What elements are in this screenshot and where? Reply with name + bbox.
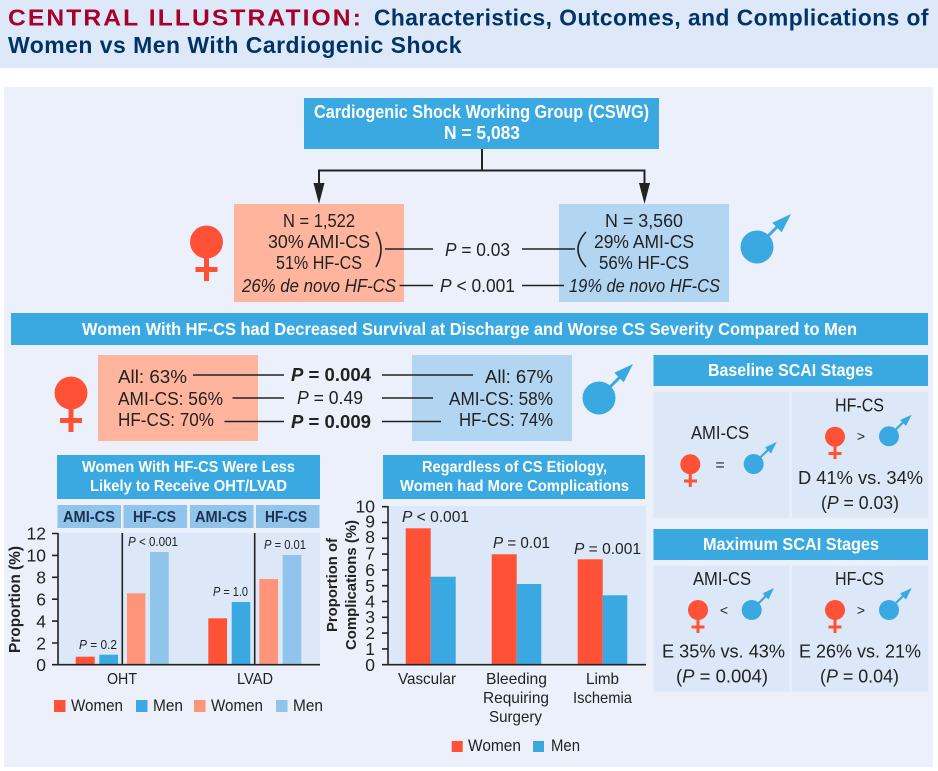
cohort box: [304, 98, 659, 149]
legend: complications chart: Women: [468, 737, 521, 755]
heading: OHT/LVAD chart: Likely to Receive OHT/LVAD: [90, 478, 287, 495]
cohort box: N = 5,083: [444, 123, 520, 143]
title: [8, 4, 929, 58]
panel: maximum AMI-CS: [654, 566, 790, 692]
bar chart: OHT and LVAD: 8: [36, 568, 46, 588]
bar chart: complications: 6: [365, 560, 375, 580]
panel: maximum AMI-CS: AMI-CS: [693, 569, 751, 589]
heading: baseline SCAI stages: [654, 355, 928, 386]
legend: OHT and LVAD chart: Men: [153, 697, 183, 715]
icon: female symbol: [190, 226, 223, 281]
bar chart: OHT and LVAD: P = 1.0: [213, 585, 248, 599]
panel: maximum AMI-CS: E 35% vs. 43%: [662, 642, 785, 662]
panel: women survival: AMI-CS: 56%: [118, 388, 223, 409]
panel: maximum AMI-CS: (P = 0.004): [676, 667, 768, 687]
heading: OHT/LVAD chart: Women With HF-CS Were Less: [82, 459, 295, 476]
cohort box: Cardiogenic Shock Working Group (CSWG): [314, 102, 649, 122]
legend: OHT and LVAD chart: Women: [71, 697, 123, 715]
bar chart: complications: 8: [365, 527, 375, 547]
bar chart: OHT and LVAD: LVAD: [237, 671, 273, 688]
title: CENTRAL ILLUSTRATION:: [8, 4, 363, 30]
bar chart: OHT and LVAD: P = 0.01: [264, 538, 306, 552]
bar chart: OHT and LVAD: 12: [27, 524, 46, 544]
panel: women cohort: 51% HF-CS: [276, 252, 362, 273]
bar chart: complications: Bleeding: [486, 671, 547, 688]
panel: baseline HF-CS: [792, 392, 928, 518]
legend: OHT and LVAD chart: Men: [293, 697, 323, 715]
panel: men cohort: [559, 204, 729, 302]
panel: women cohort: 26% de novo HF-CS: [241, 275, 397, 296]
heading: complications chart: Women had More Complications: [400, 478, 629, 495]
panel: men cohort: 56% HF-CS: [599, 252, 689, 273]
bar chart: complications: Complications (%): [343, 520, 360, 650]
panel: men survival: HF-CS: 74%: [459, 409, 553, 430]
panel: baseline HF-CS: D 41% vs. 34%: [798, 468, 923, 488]
bar chart: OHT and LVAD: P < 0.001: [128, 535, 178, 549]
bar chart: OHT and LVAD: 6: [36, 590, 46, 610]
survival comparison P values: P = 0.49: [297, 388, 363, 408]
panel: maximum HF-CS: [792, 566, 928, 692]
survival comparison P values: P = 0.004: [291, 365, 371, 385]
bar chart: complications: P = 0.01: [493, 535, 550, 552]
bar chart: complications: 10: [356, 496, 375, 516]
bar chart: complications: P = 0.001: [574, 541, 641, 558]
bar chart: complications: 9: [365, 512, 375, 532]
panel: maximum HF-CS: E 26% vs. 21%: [799, 642, 921, 662]
panel: women cohort: 30% AMI-CS: [268, 231, 370, 252]
bar chart: complications: Ischemia: [573, 690, 632, 707]
survival comparison P values: [193, 365, 473, 432]
column headers: HF-CS: [133, 509, 176, 526]
bar chart: OHT and LVAD: [7, 524, 320, 688]
column headers: [58, 505, 320, 528]
title: Characteristics, Outcomes, and Complications of: [374, 4, 929, 30]
heading: complications chart: Regardless of CS Etiology,: [422, 459, 607, 476]
panel: women survival: HF-CS: 70%: [118, 409, 214, 430]
heading: survival band: Women With HF-CS had Decreased Survival at Discharge and Worse CS Severity Compared to Men: [82, 319, 857, 339]
bar chart: complications: Vascular: [398, 671, 457, 688]
bar chart: OHT and LVAD: 0: [36, 655, 46, 675]
bar chart: complications: 3: [365, 607, 375, 627]
panel: maximum HF-CS: >: [857, 602, 865, 618]
bar chart: complications: P < 0.001: [402, 509, 469, 526]
title: Women vs Men With Cardiogenic Shock: [8, 32, 462, 58]
bar chart: OHT and LVAD: OHT: [107, 671, 137, 688]
panel: women cohort: N = 1,522: [283, 210, 355, 231]
header band: [0, 0, 938, 68]
bar chart: complications: 1: [365, 639, 375, 659]
panel: baseline AMI-CS: AMI-CS: [691, 423, 749, 443]
bar chart: complications: Surgery: [489, 709, 542, 726]
panel: women survival: All: 63%: [118, 366, 187, 387]
panel: baseline HF-CS: >: [857, 428, 865, 444]
bar chart: complications: 0: [365, 655, 375, 675]
panel: women survival: [98, 355, 258, 441]
legend: OHT and LVAD chart: Women: [211, 697, 263, 715]
panel: men cohort: 29% AMI-CS: [594, 231, 694, 252]
panel: baseline AMI-CS: =: [715, 457, 725, 474]
panel: men cohort: N = 3,560: [605, 210, 683, 231]
bar chart: OHT and LVAD: 4: [36, 612, 46, 632]
bar chart: complications: 2: [365, 623, 375, 643]
panel: maximum HF-CS: HF-CS: [835, 569, 884, 589]
heading: maximum SCAI stages: Maximum SCAI Stages: [703, 534, 879, 554]
panel: men survival: [412, 355, 572, 441]
legend: complications chart: [452, 737, 580, 755]
bar chart: complications: 4: [365, 592, 375, 612]
column headers: HF-CS: [265, 509, 307, 526]
column headers: AMI-CS: [63, 509, 115, 526]
heading: complications chart: [383, 455, 645, 499]
panel: maximum HF-CS: (P = 0.04): [820, 667, 899, 687]
heading: maximum SCAI stages: [654, 529, 928, 560]
column headers: AMI-CS: [195, 509, 247, 526]
panel: men cohort: 19% de novo HF-CS: [569, 275, 721, 296]
panel: baseline HF-CS: (P = 0.03): [821, 493, 899, 513]
bar chart: complications: Requiring: [483, 690, 549, 707]
panel: men survival: All: 67%: [485, 366, 553, 387]
panel: women cohort: [234, 204, 404, 302]
bar chart: complications: 5: [365, 576, 375, 596]
bar chart: OHT and LVAD: P = 0.2: [79, 638, 117, 652]
legend: OHT and LVAD chart: [54, 697, 323, 715]
bar chart: OHT and LVAD: Proportion (%): [7, 546, 24, 653]
survival comparison P values: P = 0.009: [291, 412, 371, 432]
panel: men survival: AMI-CS: 58%: [449, 388, 553, 409]
arrows: split to women and men: [314, 149, 650, 204]
bar chart: complications: Limb: [586, 671, 619, 688]
comparison: de novo HF: P < 0.001: [440, 276, 515, 296]
bar chart: complications: Proportion of: [324, 537, 341, 632]
heading: OHT/LVAD chart: [57, 455, 320, 499]
bar chart: OHT and LVAD: 10: [27, 546, 46, 566]
legend: complications chart: Men: [551, 737, 580, 755]
panel: baseline HF-CS: HF-CS: [835, 396, 884, 416]
bar chart: complications: 7: [365, 544, 375, 564]
icon: male symbol: [740, 214, 791, 264]
heading: baseline SCAI stages: Baseline SCAI Stages: [708, 360, 873, 380]
icon: female symbol: [54, 376, 88, 432]
panel: maximum AMI-CS: <: [720, 602, 728, 618]
bar chart: complications: [324, 496, 646, 726]
comparison: AMI and HF share: [376, 232, 586, 267]
icon: male symbol: [582, 364, 633, 414]
panel: baseline AMI-CS: [654, 392, 790, 518]
bar chart: OHT and LVAD: 2: [36, 634, 46, 654]
comparison: AMI and HF share: P = 0.03: [445, 240, 510, 260]
heading: survival band: [11, 313, 928, 345]
